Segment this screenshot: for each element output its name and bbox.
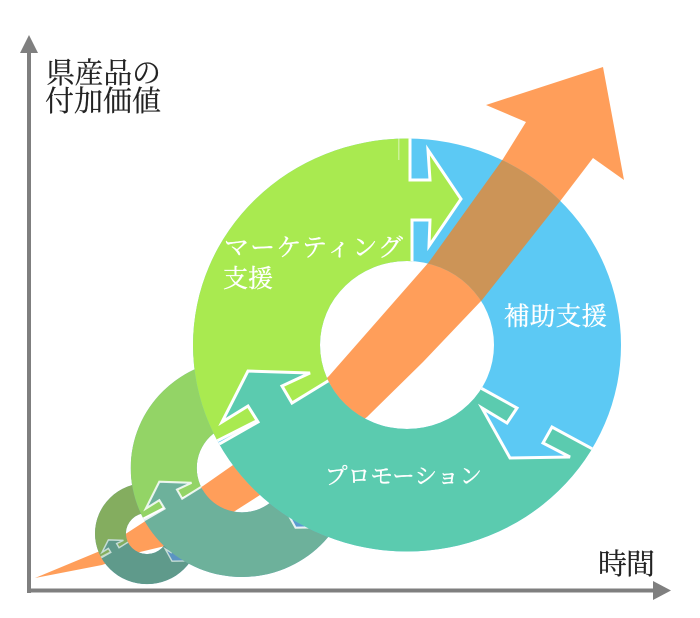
label: marketing support: 支援: [223, 265, 273, 293]
segment: marketing support (green): [193, 138, 463, 442]
label: promotion: プロモーション: [325, 464, 482, 489]
segment: promotion (teal): [218, 370, 592, 552]
label: subsidy support: 補助支援: [504, 302, 607, 331]
y axis arrow: [20, 35, 38, 593]
medium cycle ring: [130, 369, 328, 577]
label: marketing support: マーケティング: [224, 235, 403, 262]
y axis title: 県産品の: [46, 57, 161, 90]
y axis title: 付加価値: [45, 85, 161, 118]
x axis arrow: [27, 581, 671, 600]
arrow overlap on blue segment: [428, 160, 560, 301]
thin highlight on green segment: [398, 138, 400, 160]
growth arrow: [35, 67, 624, 578]
small cycle ring: [95, 485, 189, 584]
large cycle ring: [193, 138, 621, 552]
segment: subsidy support (blue): [193, 138, 621, 552]
x axis title: 時間: [598, 548, 655, 581]
